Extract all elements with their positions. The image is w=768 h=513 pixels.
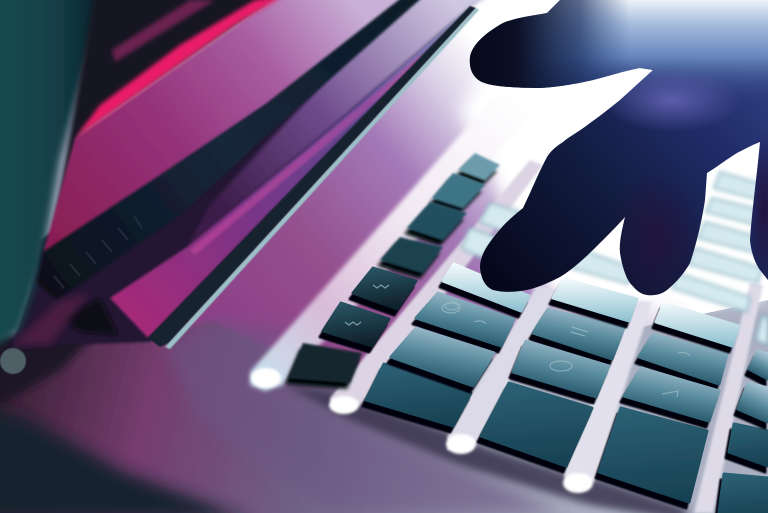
dark speaker grille: [37, 0, 425, 300]
hinge gap dark line: [148, 6, 476, 347]
hand light wash: [465, 0, 768, 310]
panel: magenta screen: [43, 0, 410, 255]
dark bottom left corner: [0, 405, 250, 513]
light streak on hinge strip: [190, 55, 424, 255]
hinge pale teal edge: [165, 8, 479, 349]
shadows under front keys: [285, 385, 690, 513]
hand silhouette: [465, 0, 768, 310]
glossy keys: [391, 293, 768, 422]
dim magenta streak: [112, 0, 215, 62]
pale upper keys: [462, 172, 768, 345]
grey shadow on deck: [165, 320, 560, 513]
panel: teal lid edge: [0, 0, 105, 350]
magenta plum shade under grille: [12, 292, 90, 345]
dark underlay behind hinge: [10, 0, 480, 350]
dark upper screen: [50, 0, 285, 250]
light key gutters: [250, 90, 763, 513]
out of focus top keys: [288, 153, 500, 383]
laptop screen and hinge: [0, 0, 490, 374]
dark notch under hinge: [62, 298, 118, 335]
key glyph marks: [345, 285, 690, 397]
pale keys: [443, 264, 739, 346]
keyboard keys: [288, 153, 768, 513]
pink highlight: [75, 0, 285, 138]
purple hinge strip: [110, 8, 468, 338]
mid teal keys: [366, 364, 768, 513]
pale lid edge band: [187, 0, 490, 247]
grille teeth: [54, 216, 142, 288]
palm and fingers: [470, 0, 768, 295]
dark left join: [0, 330, 100, 410]
white glow around fingers: [450, 0, 768, 310]
sharp dark keys: [323, 268, 416, 346]
status light: [0, 348, 26, 374]
